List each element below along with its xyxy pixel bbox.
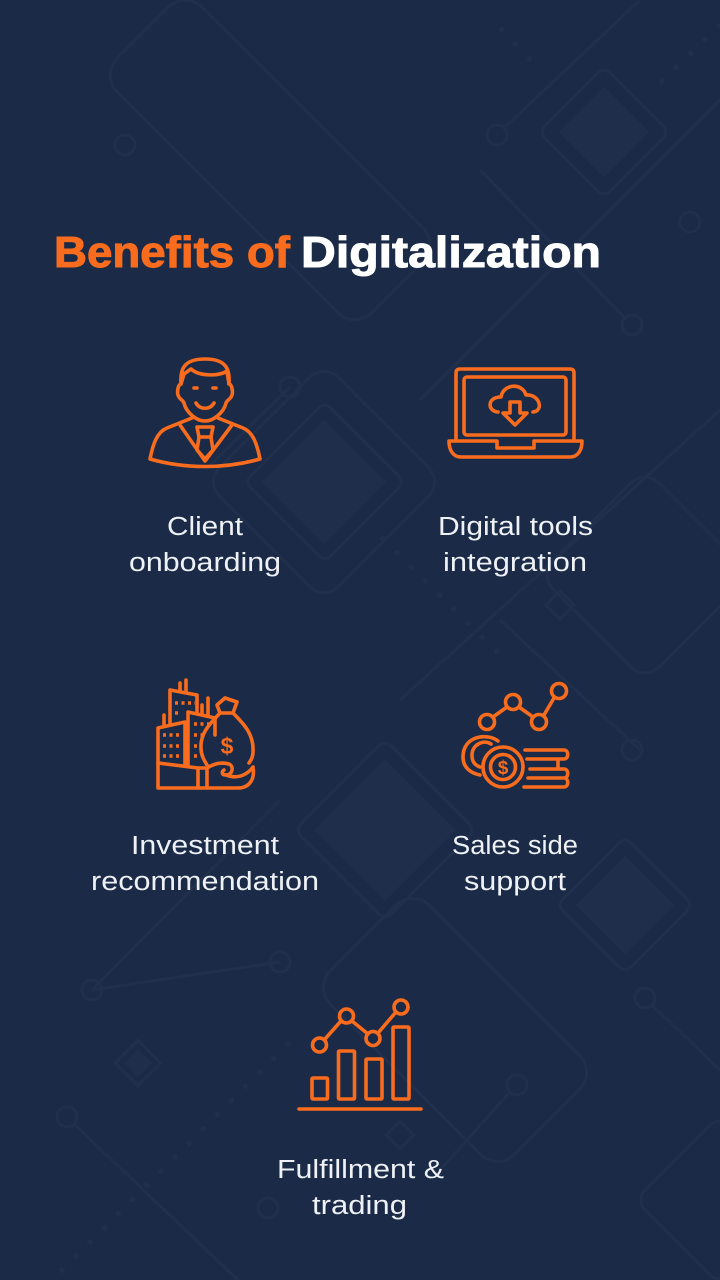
label: investment recommendation: [91, 832, 319, 896]
label: client onboarding: onboarding: [129, 549, 281, 577]
icon: bar chart with trend line: [299, 1000, 421, 1109]
icon: coins and trend line: $: [498, 758, 509, 779]
icon: buildings and money bag: $: [221, 733, 234, 759]
title: [54, 228, 601, 277]
label: investment recommendation: Investment: [131, 832, 279, 860]
label: sales side support: support: [464, 868, 566, 896]
label: sales side support: Sales side: [452, 832, 578, 860]
title: Digitalization: [301, 228, 601, 277]
label: fulfillment and trading: trading: [312, 1192, 407, 1220]
label: fulfillment and trading: [277, 1156, 444, 1220]
title: Benefits of: [54, 228, 290, 277]
label: digital tools integration: integration: [443, 549, 587, 577]
label: fulfillment and trading: Fulfillment &: [277, 1156, 444, 1184]
label: digital tools integration: Digital tools: [438, 513, 593, 541]
label: client onboarding: [129, 513, 281, 577]
icon: coins and trend line: [463, 684, 568, 787]
label: investment recommendation: recommendation: [91, 868, 319, 896]
icon: laptop with cloud download: [449, 369, 582, 457]
label: sales side support: [452, 832, 578, 896]
icon: client in suit: [150, 359, 260, 466]
label: digital tools integration: [438, 513, 593, 577]
label: client onboarding: Client: [167, 513, 243, 541]
icon: buildings and money bag: [158, 680, 253, 788]
